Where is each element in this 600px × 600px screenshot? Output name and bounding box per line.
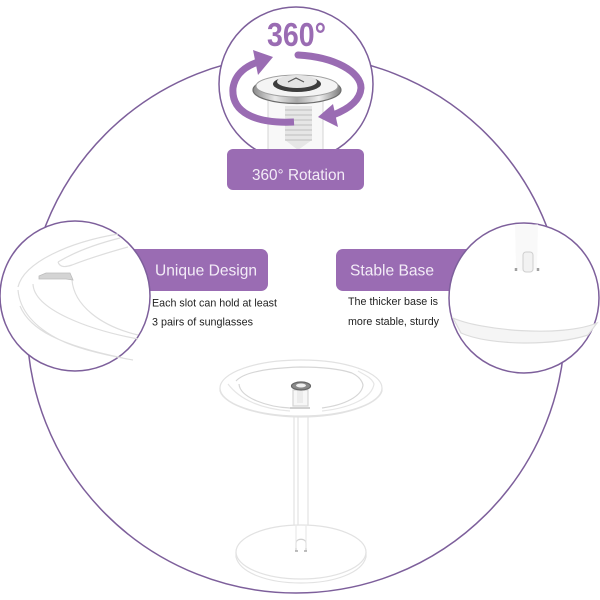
label: 360 rotation (227, 149, 364, 190)
text: stable base description (348, 296, 439, 328)
text: unique design description: 3 pairs of sunglasses (152, 316, 253, 328)
detail circle: unique design slot (0, 221, 150, 371)
stand centre bolt (292, 382, 310, 406)
stand top tray (220, 360, 382, 417)
text: stable base description: more stable, sturdy (348, 316, 439, 328)
detail circle: top rotation (219, 7, 373, 161)
label: stable base: Stable Base (350, 262, 434, 280)
text: unique design description: Each slot can hold at least (152, 298, 277, 310)
heading: 360 degrees: 360° (267, 16, 326, 53)
icon: bolt head (253, 75, 341, 104)
arrow: rotation left (233, 50, 294, 122)
detail circle: stable base (449, 223, 599, 373)
label: 360 rotation: 360° Rotation (252, 167, 345, 184)
label: stable base (336, 249, 486, 291)
label: unique design: Unique Design (155, 262, 257, 280)
icon: bolt shaft (268, 100, 323, 155)
label: unique design (120, 249, 268, 291)
arrow: rotation right (298, 55, 361, 127)
stand base (236, 525, 366, 583)
stand pole (294, 415, 308, 548)
text: stable base description: The thicker base is (348, 296, 438, 308)
product: acrylic sunglasses stand (220, 360, 382, 583)
text: unique design description (152, 298, 277, 328)
